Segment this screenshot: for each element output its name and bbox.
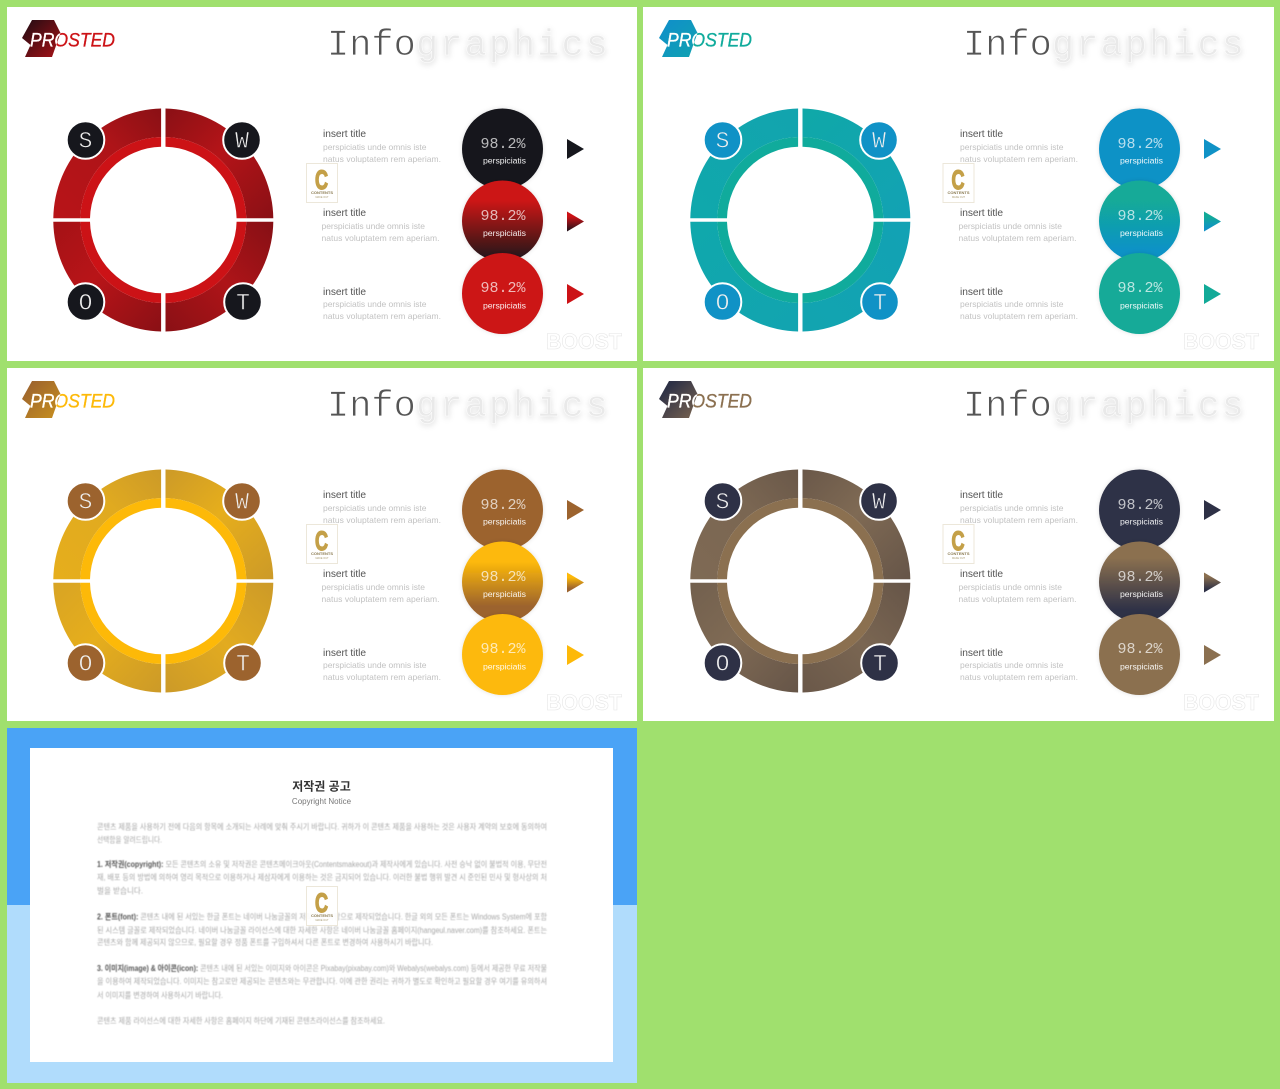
ring chart [690,470,910,692]
text block 2: perspiciatis unde omnis iste [322,582,425,592]
ring chart [53,108,273,332]
text block 1 [323,490,441,525]
watermark stamp: MAKE OUT [952,557,965,560]
title: Info [963,386,1052,428]
watermark stamp: C [952,526,964,556]
arrow 1 [1204,139,1221,159]
text block 2: insert title [323,208,366,219]
stat circle 3: perspiciatis [1120,662,1164,672]
stat circle 2: perspiciatis [1120,228,1164,238]
badge O [67,283,104,321]
watermark stamp: CONTENTS [948,190,970,195]
text block 3: perspiciatis unde omnis iste [960,299,1064,309]
notice subheading: Copyright Notice [292,797,352,806]
badge T [224,644,262,682]
notice heading: 저작권 공고 [292,778,351,794]
stat circle 3 [462,614,543,695]
watermark stamp [943,164,974,202]
text block 2: natus voluptatem rem aperiam. [958,233,1076,243]
notice body text: 을 이용하여 제작되었습니다. 이미지는 참고로만 제공되는 콘텐츠와는 무관합니다. 이에 관한 권리는 귀하가 별도로 확인하고 필요할 경우 여기를 유의하셔 [97,976,547,986]
stat circle 2: perspiciatis [483,589,527,599]
stat circle 2: 98.2% [480,569,526,586]
badge S [67,482,104,520]
text block 1 [960,129,1078,164]
text block 1: natus voluptatem rem aperiam. [323,515,441,525]
watermark stamp: MAKE OUT [315,196,329,199]
stat circle 2 [462,542,543,622]
stat circle 3: perspiciatis [1120,300,1164,310]
notice body text: 콘텐츠 제품 라이선스에 대한 자세한 사항은 홈페이지 하단에 기재된 콘텐츠라이선스를 참조하세요. [97,1016,385,1026]
badge O: O [716,652,729,678]
text block 1: natus voluptatem rem aperiam. [960,154,1078,164]
text block 2: insert title [960,569,1003,580]
arrow 3 [1204,645,1221,665]
arrow 2 [567,212,584,232]
badge W [223,121,261,159]
watermark stamp: C [315,165,328,195]
text block 2: perspiciatis unde omnis iste [958,582,1062,592]
ring chart [690,108,910,332]
stat circle 2: 98.2% [1118,569,1163,586]
notice body text: 1. 저작권(copyright): 모든 콘텐츠의 소유 및 저작권은 콘텐츠메이크아웃(Contentsmakeout)과 제작사에게 있습니다. 사전 승낙 없이 불법적 이용, 무단전 [97,859,547,869]
text block 1 [323,129,441,164]
watermark stamp [306,164,338,202]
title: graphics [416,25,608,67]
watermark stamp: C [315,526,328,556]
stat circle 1: 98.2% [1118,136,1163,153]
badge W: W [872,128,886,154]
stat circle 2 [1099,180,1180,262]
title: Info [327,386,416,428]
title: graphics [416,386,608,428]
title [963,25,1244,67]
badge T [861,283,899,321]
watermark stamp [306,886,338,926]
notice body text: 선택함을 알려드립니다. [97,834,162,844]
arrow 3 [567,284,584,304]
notice body text: 재, 배포 등의 방법에 의하여 영리 목적으로 이용하거나 제삼자에게 이용하는 것은 금지되어 있습니다. 이러한 불법 행위 발견 시 준인된 민사 및 형사상의 처 [97,872,547,882]
arrow 1 [1204,500,1221,520]
stat circle 1: perspiciatis [483,156,527,166]
stat circle 1: 98.2% [480,497,526,514]
text block 1: perspiciatis unde omnis iste [960,503,1064,513]
title [327,386,608,428]
text block 1 [960,490,1078,525]
arrow 2 [567,572,584,592]
arrow 1 [567,139,584,159]
stat circle 1 [462,108,543,190]
text block 3: perspiciatis unde omnis iste [323,299,427,309]
ring chart [53,470,273,692]
badge S [67,121,104,159]
text block 1: natus voluptatem rem aperiam. [960,515,1078,525]
stat circle 2 [462,180,543,262]
badge S: S [716,128,729,154]
text block 3 [960,648,1078,682]
badge T: T [873,652,887,678]
stat circle 2: 98.2% [480,208,526,225]
logo: gold [22,381,115,418]
text block 3: natus voluptatem rem aperiam. [323,311,441,321]
text block 3: insert title [960,287,1003,298]
text block 3: insert title [960,648,1003,659]
logo: red: PROSTED [30,30,115,52]
arrow 2 [1204,572,1221,592]
badge T: T [236,290,250,316]
badge W [860,121,898,159]
watermark stamp [306,524,338,564]
logo: teal: PROSTED [667,30,752,52]
title: Info [327,25,416,67]
text block 3: insert title [323,648,366,659]
badge O [67,644,104,682]
text block 3 [960,287,1078,321]
stat circle 1: perspiciatis [483,516,527,526]
text block 3: natus voluptatem rem aperiam. [323,672,441,682]
watermark stamp: MAKE OUT [315,557,329,560]
badge T: T [873,290,887,316]
notice body text: 된 시스템 글꼴로 제작되었습니다. 네이버 나눔글꼴 라이선스에 대한 자세한 사항은 네이버 나눔글꼴 홈페이지(hangeul.naver.com)를 참조하세요. 폰트는 [97,925,547,935]
stat circle 2 [1099,542,1180,622]
text block 2: natus voluptatem rem aperiam. [322,233,440,243]
text block 2 [958,208,1076,243]
badge S: S [716,490,729,516]
notice body text: 2. 폰트(font): 콘텐츠 내에 된 서있는 한글 폰트는 네이버 나눔글꼴의 저작권을 바탕으로 제작되었습니다. 한글 외의 모든 폰트는 Windows System에 포함 [97,912,548,922]
stat circle 1 [1099,470,1180,550]
text block 2: natus voluptatem rem aperiam. [958,594,1076,604]
title: Info [963,25,1052,67]
stat circle 2: perspiciatis [1120,589,1164,599]
badge W [860,482,898,520]
text block 3: insert title [323,287,366,298]
panel: copyright notice [7,728,637,1083]
text block 1: insert title [323,490,366,501]
text block 3: perspiciatis unde omnis iste [960,660,1064,670]
watermark stamp: CONTENTS [311,913,333,918]
watermark stamp: MAKE OUT [952,196,965,199]
panel: teal SWOT [643,7,1274,361]
stat circle 2: 98.2% [1118,208,1163,225]
text block 3 [323,648,441,682]
logo: gold: PROSTED [30,392,115,412]
badge T [224,283,262,321]
badge W: W [872,490,886,516]
stat circle 1: perspiciatis [1120,156,1164,166]
text block 3: perspiciatis unde omnis iste [323,660,427,670]
logo: brown: PROSTED [667,392,752,412]
title: graphics [1052,25,1244,67]
badge O: O [79,652,92,678]
title [963,386,1244,428]
stat circle 3: 98.2% [1118,280,1163,297]
text block 3: natus voluptatem rem aperiam. [960,672,1078,682]
notice body text: 서 이미지를 변경하여 사용하시기 바랍니다. [97,990,223,1000]
badge T [861,644,899,682]
text block 1: perspiciatis unde omnis iste [960,142,1064,152]
badge S: S [79,128,92,154]
panel: red SWOT [7,7,637,361]
stat circle 1: 98.2% [1118,497,1163,514]
badge T: T [236,652,250,678]
stat circle 1: 98.2% [480,136,526,153]
logo: brown: PROSTED [667,392,752,412]
text block 1: natus voluptatem rem aperiam. [323,154,441,164]
badge O [704,644,741,682]
watermark stamp: CONTENTS [311,190,333,195]
text block 1: perspiciatis unde omnis iste [323,142,427,152]
text block 2: insert title [323,569,366,580]
stat circle 2: perspiciatis [483,228,527,238]
text block 1: insert title [960,129,1003,140]
text block 2: perspiciatis unde omnis iste [322,221,425,231]
watermark stamp: CONTENTS [948,551,970,556]
logo: brown [659,381,752,418]
stat circle 3: 98.2% [480,641,526,658]
text block 1: insert title [323,129,366,140]
stat circle 3 [462,253,543,334]
notice body text [97,822,548,1026]
text block 3 [323,287,441,321]
badge W: W [235,128,249,154]
boost mark: BOOST [546,329,623,354]
badge S [704,482,741,520]
badge W: W [235,490,249,516]
boost mark: BOOST [1183,690,1260,715]
badge W [223,482,261,520]
stat circle 1 [1099,108,1180,190]
text block 3: natus voluptatem rem aperiam. [960,311,1078,321]
stat circle 3: perspiciatis [483,300,527,310]
badge S [704,121,741,159]
arrow 2 [1204,212,1221,232]
notice body text: 콘텐츠 제품을 사용하기 전에 다음의 항목에 소개되는 사례에 맞춰 주시기 바랍니다. 귀하가 이 콘텐츠 제품을 사용하는 것은 사용자 계약의 보호에 동의하여 [97,822,547,832]
stat circle 3: perspiciatis [483,662,527,672]
stat circle 3: 98.2% [1118,641,1163,658]
text block 2: insert title [960,208,1003,219]
arrow 3 [567,645,584,665]
boost mark: BOOST [1183,329,1260,354]
arrow 1 [567,500,584,520]
badge S: S [79,490,92,516]
watermark stamp: C [952,165,964,195]
stat circle 1 [462,470,543,550]
logo: gold: PROSTED [30,392,115,412]
badge O: O [716,290,729,316]
stat circle 1: perspiciatis [1120,516,1164,526]
text block 1: insert title [960,490,1003,501]
title [327,25,608,67]
stat circle 3 [1099,614,1180,695]
notice body text: 벌을 받습니다. [97,886,143,896]
stat circle 3 [1099,253,1180,334]
watermark stamp [943,524,974,564]
text block 1: perspiciatis unde omnis iste [323,503,427,513]
text block 2: perspiciatis unde omnis iste [958,221,1062,231]
logo: red [22,20,115,57]
badge O: O [79,290,92,316]
logo: teal: PROSTED [667,30,752,52]
notice body text: 3. 이미지(image) & 아이콘(icon): 콘텐츠 내에 된 서있는 이미지와 아이콘은 Pixabay(pixabay.com)와 Webalys(webalys.com) 등에서 제공한 무료 저작물 [97,963,547,973]
watermark stamp: MAKE OUT [315,919,329,922]
title: graphics [1052,386,1244,428]
text block 2 [322,569,440,604]
text block 2 [322,208,440,243]
watermark stamp: C [315,888,328,918]
logo: red: PROSTED [30,30,115,52]
watermark stamp: CONTENTS [311,551,333,556]
text block 2 [958,569,1076,604]
stat circle 3: 98.2% [480,280,526,297]
text block 2: natus voluptatem rem aperiam. [322,594,440,604]
logo: teal [659,20,752,57]
panel: gold SWOT [7,368,637,721]
arrow 3 [1204,284,1221,304]
badge O [704,283,741,321]
notice body text: 콘텐츠와 함께 제공되지 않으므로, 필요할 경우 정품 폰트를 구입하셔서 다른 폰트로 변경하여 사용하시기 바랍니다. [97,937,433,947]
boost mark: BOOST [546,690,623,715]
panel: brown SWOT [643,368,1274,721]
